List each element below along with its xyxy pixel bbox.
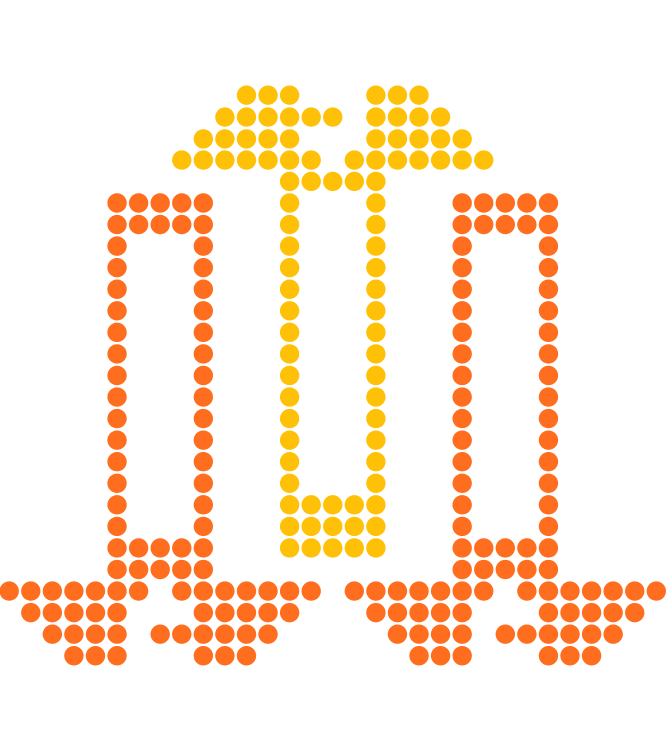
orange base far left [9, 591, 139, 656]
yellow right wing [354, 95, 484, 160]
yellow left wing [182, 95, 333, 160]
yellow central column [290, 181, 376, 548]
orange base far right [505, 591, 657, 656]
orange left column [117, 203, 204, 570]
orange base centre right [354, 591, 484, 656]
orange right column [462, 203, 549, 570]
orange base centre left [160, 591, 312, 656]
